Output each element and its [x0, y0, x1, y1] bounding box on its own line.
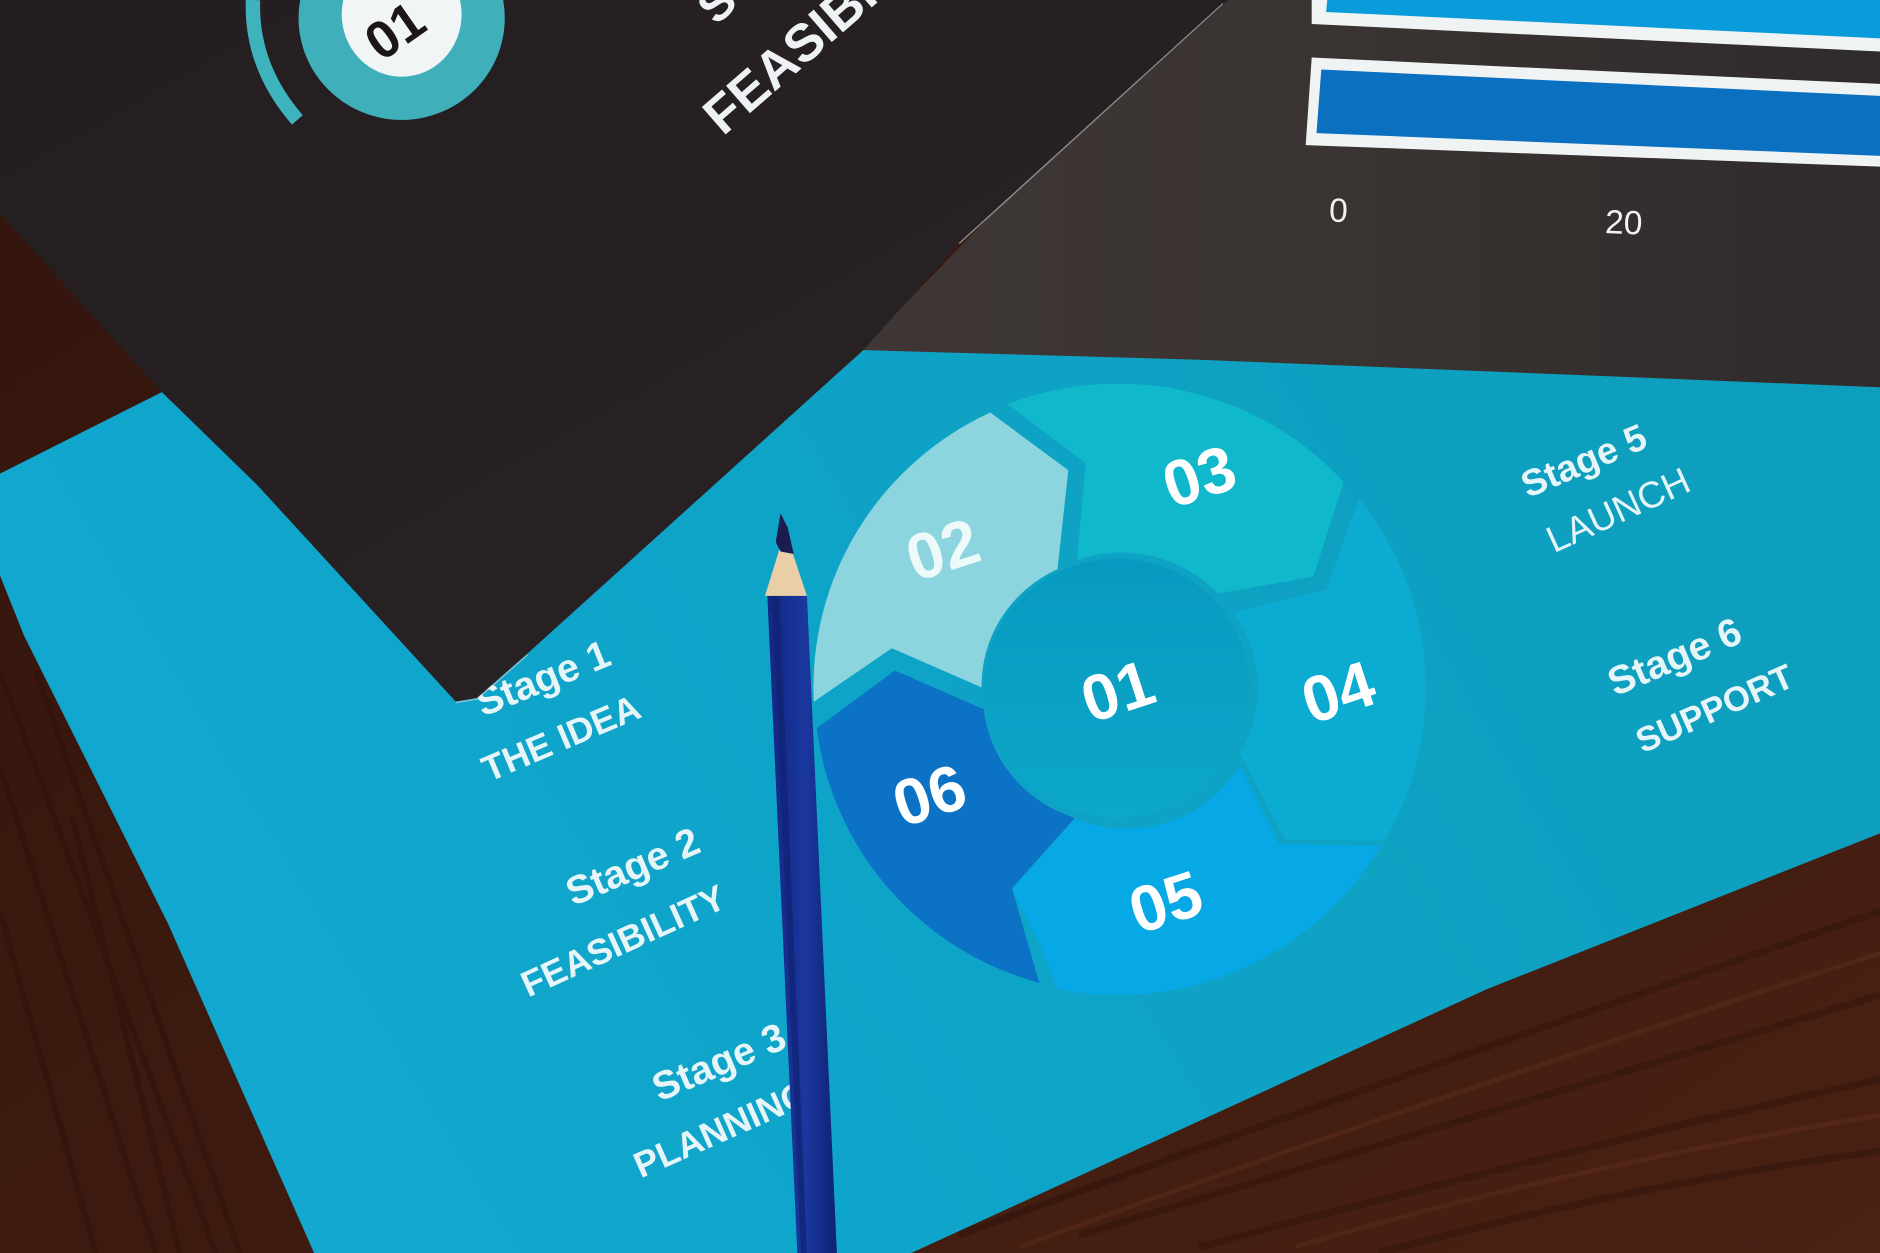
- label: stage 2: Stage 2: [559, 819, 706, 915]
- axis labels: 20: [1604, 204, 1643, 242]
- segment 01 centre: 01: [1072, 645, 1163, 737]
- label: stage 6: Stage 6: [1601, 609, 1748, 705]
- label: stage 6: SUPPORT: [1630, 658, 1799, 761]
- label: stage 2: FEASIBILITY: [515, 876, 732, 1005]
- right stage labels: [1515, 415, 1799, 761]
- icon: step 01 badge: [253, 0, 505, 120]
- segment 06: 06: [884, 749, 975, 841]
- segment 05: [1012, 766, 1381, 995]
- segment 02: 02: [897, 504, 988, 595]
- segment 01 centre: [984, 559, 1250, 818]
- left stage labels: [470, 632, 816, 1186]
- segment 05: 05: [1120, 856, 1211, 948]
- bar: lower: [1306, 58, 1880, 167]
- axis labels: 0: [1328, 193, 1348, 230]
- label: stage 3: PLANNING: [627, 1072, 816, 1186]
- panel: blue infographic sheet: [0, 300, 1880, 1253]
- cycle diagram with six numbered stages: [813, 384, 1426, 995]
- label: stage 1: THE IDEA: [476, 686, 646, 790]
- panel: grey dark sheet with bar chart: [839, 0, 1880, 387]
- label: stage 6: [1601, 609, 1799, 761]
- segment 06: [817, 671, 1075, 983]
- label: stage 1: Stage 1: [470, 632, 617, 725]
- label: stage 5: Stage 5: [1515, 415, 1653, 506]
- segment 03: 03: [1154, 430, 1245, 522]
- label: stage 3: Stage 3: [646, 1015, 792, 1110]
- label: stage 2: [515, 819, 732, 1005]
- bar: upper: [1312, 0, 1880, 52]
- pencil: [765, 513, 837, 1253]
- segment 03: [1008, 384, 1344, 594]
- axis labels: [1328, 193, 1643, 242]
- label: stage 1: [470, 632, 646, 790]
- bar chart: [1306, 0, 1880, 242]
- label: stage 3: [627, 1015, 816, 1186]
- label: stage 5: [1515, 415, 1696, 561]
- panel: black sheet with step badge: [0, 0, 1229, 703]
- segment 04: 04: [1293, 646, 1384, 738]
- segment 02: [813, 413, 1068, 702]
- label: stage 5: LAUNCH: [1540, 459, 1696, 561]
- segment 04: [1233, 499, 1426, 840]
